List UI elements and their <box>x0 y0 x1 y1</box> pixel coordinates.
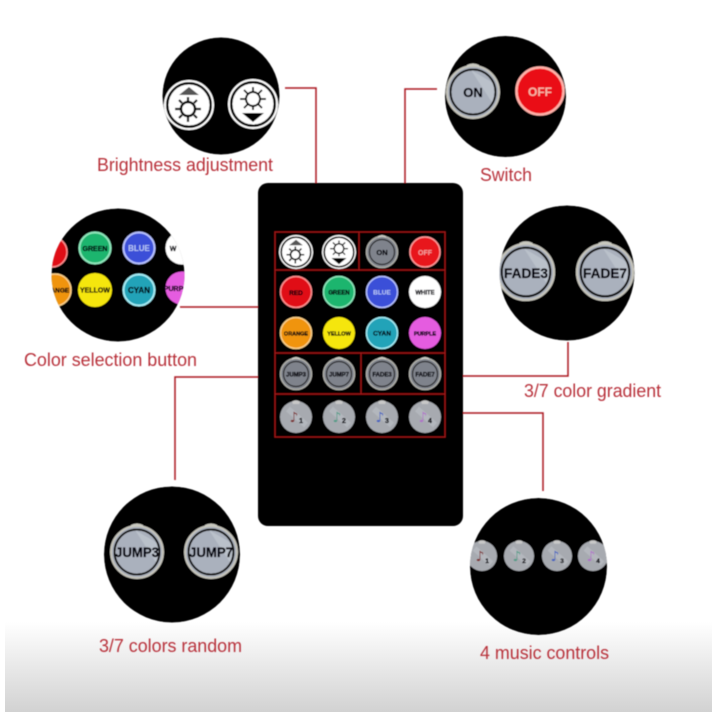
callout: color selection: CYAN <box>128 286 150 295</box>
remote control <box>258 183 463 526</box>
button group outlines <box>275 232 445 437</box>
label: switch: Switch <box>480 165 532 185</box>
on and off buttons <box>366 236 440 268</box>
jump and fade buttons <box>280 358 440 390</box>
callout: music buttons: 1 <box>485 558 489 565</box>
callout: jump buttons: JUMP3 <box>115 544 159 560</box>
callout: switch: OFF <box>528 85 552 99</box>
music buttons: ♪ <box>419 410 427 426</box>
color buttons: GREEN <box>328 290 350 296</box>
music buttons: ♪ <box>290 410 298 426</box>
remote body <box>258 183 463 526</box>
color buttons: PURPLE <box>414 332 436 338</box>
callout: color selection: YELLOW <box>80 288 110 294</box>
callout: music buttons: ♪ <box>513 549 521 565</box>
label: music controls: 4 music controls <box>480 643 609 663</box>
jump and fade buttons: JUMP7 <box>329 372 350 378</box>
callout: color selection: ORANGE <box>41 288 70 294</box>
label: color selection button: Color selection button <box>24 350 197 370</box>
callout: fade buttons: FADE3 <box>504 265 548 281</box>
callout: switch <box>445 36 566 157</box>
on and off buttons: OFF <box>418 250 433 257</box>
callout: music buttons: 3 <box>560 558 564 565</box>
callout: jump buttons <box>104 486 240 622</box>
music buttons: 4 <box>428 418 432 425</box>
callout: color selection: GREEN <box>83 246 107 253</box>
music buttons: 2 <box>342 418 346 425</box>
callout: music buttons: ♪ <box>551 549 559 565</box>
label: colors random: 3/7 colors random <box>99 636 242 656</box>
callout: music buttons <box>467 498 608 635</box>
music buttons: 3 <box>385 418 389 425</box>
color buttons <box>280 276 441 349</box>
callout: switch: ON <box>463 85 483 100</box>
label: brightness adjustment: Brightness adjustment <box>97 155 273 175</box>
music buttons: 1 <box>299 418 303 425</box>
callout: fade buttons <box>498 206 634 340</box>
jump and fade buttons: JUMP3 <box>286 372 307 378</box>
color buttons: ORANGE <box>284 332 308 338</box>
callout: color selection: W <box>170 246 177 253</box>
music buttons: ♪ <box>333 410 341 426</box>
callout: music buttons: ♪ <box>476 549 484 565</box>
brightness buttons <box>280 236 355 268</box>
callout: music buttons: 4 <box>596 558 600 565</box>
callout: brightness adjustment <box>162 38 280 154</box>
callout: color selection: BLUE <box>128 244 151 253</box>
callout: music buttons: ♪ <box>587 549 595 565</box>
color buttons: CYAN <box>373 330 391 338</box>
music buttons: ♪ <box>376 410 384 426</box>
on and off buttons: ON <box>376 248 388 257</box>
callout: jump buttons: JUMP7 <box>189 544 233 560</box>
color buttons: RED <box>289 290 303 297</box>
callout: color selection <box>50 208 186 342</box>
label: color gradient: 3/7 color gradient <box>524 381 661 401</box>
background floor gradient <box>5 622 712 712</box>
callout: color selection: PURPLE <box>164 286 193 293</box>
callout: fade buttons: FADE7 <box>583 265 627 281</box>
jump and fade buttons: FADE3 <box>372 372 392 378</box>
color buttons: BLUE <box>373 290 392 296</box>
music buttons <box>280 400 441 433</box>
connector lines <box>175 88 568 491</box>
illustration <box>24 36 661 663</box>
jump and fade buttons: FADE7 <box>415 372 435 378</box>
callout: music buttons: 2 <box>522 558 526 565</box>
color buttons: WHITE <box>415 290 435 296</box>
color buttons: YELLOW <box>327 332 352 338</box>
